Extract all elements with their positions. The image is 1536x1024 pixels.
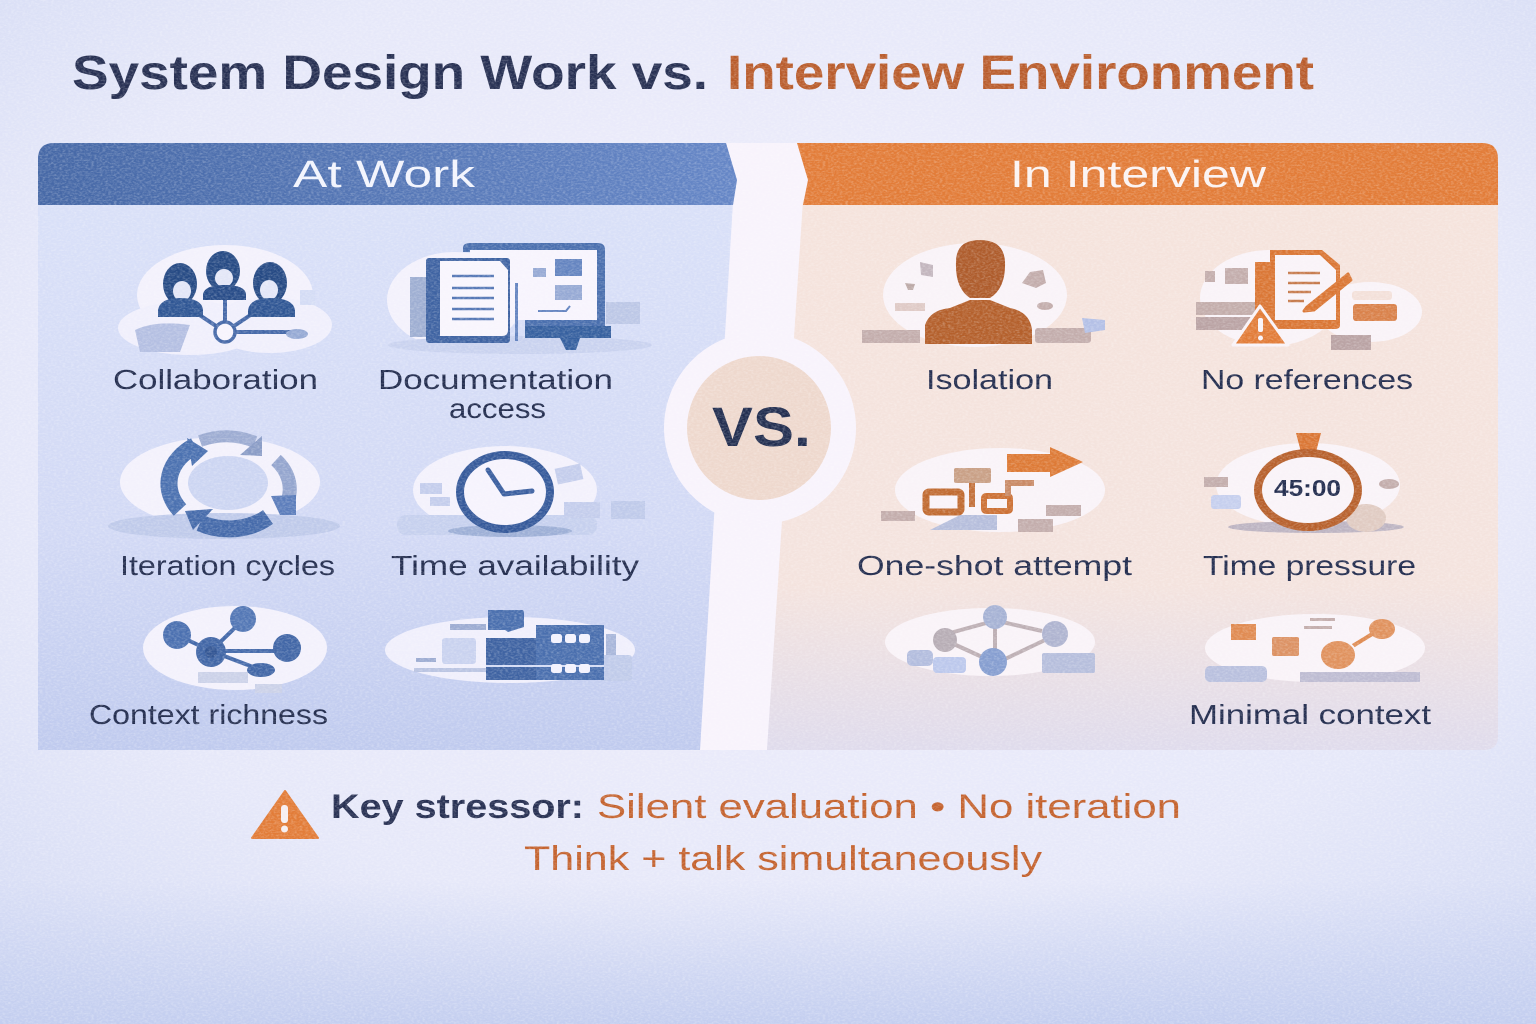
icon: documents and monitor xyxy=(387,243,652,354)
header: at work: At Work xyxy=(293,154,476,196)
text: key stressor: Key stressor: xyxy=(331,788,584,826)
header: in interview xyxy=(797,143,1498,205)
label: context richness: Context richness xyxy=(89,699,328,730)
icon: organisation building xyxy=(385,610,635,683)
header: in interview: In Interview xyxy=(1010,154,1267,196)
icon: warning triangle xyxy=(252,791,318,838)
panel body: at work xyxy=(38,200,733,750)
label: isolation: Isolation xyxy=(926,364,1053,395)
title xyxy=(72,47,1314,100)
header: at work xyxy=(38,143,737,205)
icon: stopwatch: 45:00 xyxy=(1274,475,1341,501)
text: key stressor: Silent evaluation • No iteration xyxy=(597,788,1181,826)
icon: iteration arrows xyxy=(108,436,340,539)
panel: at work xyxy=(38,143,737,750)
label: documentation access xyxy=(378,364,613,424)
icon: checklist with warning xyxy=(1196,250,1422,350)
icon: stopwatch xyxy=(1204,433,1404,533)
item: time pressure xyxy=(1203,433,1416,581)
item: isolation xyxy=(862,240,1105,395)
icon: one-shot arrow path xyxy=(881,447,1105,532)
label: time pressure: Time pressure xyxy=(1203,550,1416,581)
item: no references xyxy=(1196,250,1422,395)
title: System Design Work vs. xyxy=(72,47,708,100)
icon: sparse network xyxy=(885,605,1095,676)
panel body: in interview xyxy=(767,200,1498,750)
label: one-shot attempt: One-shot attempt xyxy=(857,550,1132,581)
label: iteration cycles: Iteration cycles xyxy=(120,550,335,581)
key stressor callout xyxy=(252,788,1181,878)
item: minimal context xyxy=(1189,614,1431,730)
panel: in interview xyxy=(767,143,1498,750)
title: Interview Environment xyxy=(727,47,1314,100)
icon: context network xyxy=(143,606,327,693)
item: context richness xyxy=(89,606,328,730)
label: documentation access: access xyxy=(449,393,546,424)
label: documentation access: Documentation xyxy=(378,364,613,395)
label: no references: No references xyxy=(1201,364,1413,395)
item: documentation access xyxy=(378,243,652,424)
item: collaboration xyxy=(113,245,332,395)
label: time availability: Time availability xyxy=(391,550,639,581)
icon: collaboration team xyxy=(118,245,332,355)
vs badge xyxy=(664,332,856,524)
icon: sparse context nodes xyxy=(1205,614,1425,682)
text: key stressor: Think + talk simultaneously xyxy=(524,840,1042,878)
item: one-shot attempt xyxy=(857,447,1132,581)
item: time availability xyxy=(391,446,645,581)
text: key stressor xyxy=(331,788,1181,878)
label: collaboration: Collaboration xyxy=(113,364,318,395)
label: minimal context: Minimal context xyxy=(1189,699,1431,730)
icon: lone person xyxy=(862,240,1105,347)
icon: clock xyxy=(397,446,645,537)
vs badge: VS. xyxy=(712,395,811,458)
item: iteration cycles xyxy=(108,436,340,581)
